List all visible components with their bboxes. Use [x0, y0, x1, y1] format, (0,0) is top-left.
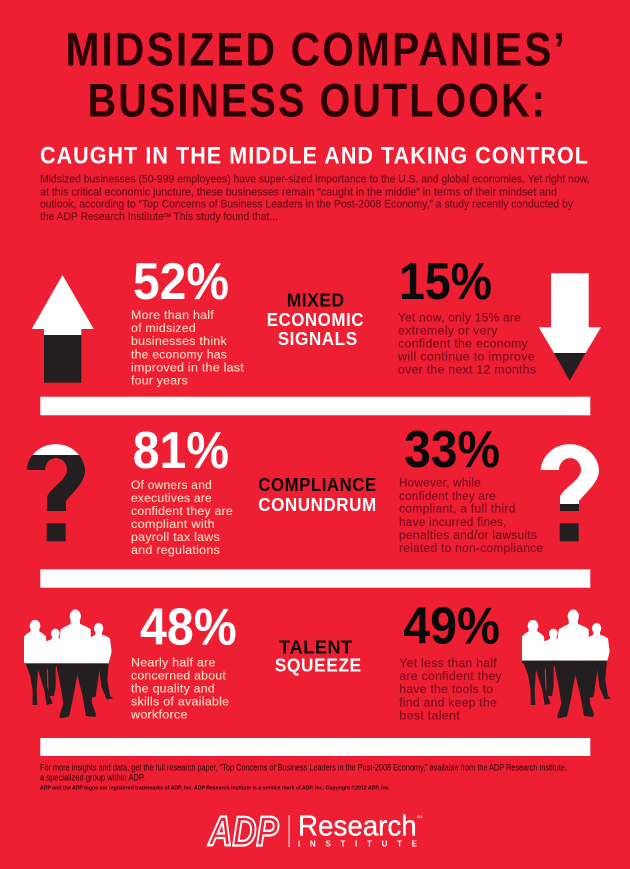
icon: people silhouette right — [522, 610, 611, 718]
stat: 15 percent — [397, 253, 536, 376]
text: 81 percent description — [131, 478, 233, 557]
text: 33 percent description — [399, 476, 543, 555]
text: 15 percent description: Yet now, only 15% are — [398, 311, 521, 325]
band 3 — [40, 738, 590, 756]
stat: 33 percent — [399, 421, 543, 555]
text: 33 percent description: However, while — [399, 476, 481, 490]
text: 52 percent description: four years — [131, 374, 188, 388]
text: 52 percent description — [131, 308, 244, 388]
text: 52 percent description: improved in the last — [131, 360, 244, 374]
heading: talent squeeze — [275, 636, 362, 676]
intro paragraph: This study found that... — [171, 211, 278, 223]
heading: mixed economic signals: MIXED — [287, 290, 345, 311]
icon: question mark right — [541, 444, 599, 541]
intro paragraph: Midsized businesses (50-999 employees) have super-sized importance to the U.S. and global economies. Yet right now, — [40, 174, 590, 186]
text: 49 percent description: have the tools to — [399, 682, 493, 696]
heading: compliance conundrum: COMPLIANCE — [258, 474, 377, 495]
text: 48 percent description: skills of available — [131, 695, 229, 709]
text: 15 percent description: confident the economy — [398, 337, 529, 351]
title: BUSINESS OUTLOOK: — [88, 74, 547, 127]
footer note — [40, 763, 567, 792]
text: 48 percent description: Nearly half are — [131, 656, 216, 670]
text: 15 percent description: will continue to improve — [397, 350, 535, 364]
text: 49 percent description: find and keep the — [399, 696, 497, 710]
stat: 52 percent: 52% — [133, 253, 229, 311]
heading: compliance conundrum: CONUNDRUM — [258, 494, 377, 515]
stat: 81 percent — [131, 422, 233, 557]
text: 33 percent description: penalties and/or lawsuits — [399, 528, 537, 542]
logo mark: ADP: ADP — [208, 808, 279, 854]
heading: compliance conundrum — [258, 474, 377, 515]
band 1 — [40, 397, 590, 415]
stat: 49 percent — [399, 597, 503, 722]
text: 49 percent description: best talent — [399, 708, 460, 722]
title — [66, 23, 567, 127]
text: 81 percent description: payroll tax laws — [131, 530, 220, 544]
intro paragraph: at this critical economic juncture, these businesses remain “caught in the middle” in terms of their mindset and — [40, 186, 557, 198]
icon: question mark left — [27, 444, 85, 541]
stat: 81 percent: 81% — [133, 422, 229, 480]
text: 49 percent description — [399, 656, 503, 722]
text: 48 percent description: the quality and — [131, 682, 215, 696]
intro paragraph — [40, 174, 590, 223]
logo: ADP Research Institute — [208, 808, 422, 854]
text: 52 percent description: the economy has — [131, 348, 227, 362]
heading: talent squeeze: SQUEEZE — [275, 655, 362, 676]
logo divider — [289, 815, 290, 847]
text: 52 percent description: businesses think — [131, 334, 228, 348]
text: 81 percent description: and regulations — [131, 543, 220, 557]
heading: mixed economic signals — [267, 290, 364, 349]
icon: people silhouette left — [24, 610, 113, 718]
band 2 — [40, 569, 590, 588]
text: 49 percent description: Yet less than half — [399, 656, 497, 670]
text: 33 percent description: compliant, a full third — [399, 502, 516, 516]
text: 81 percent description: compliant with — [131, 517, 215, 531]
text: 15 percent description: extremely or very — [398, 324, 498, 338]
footer note: a specialized group within ADP. — [40, 772, 145, 782]
icon: up arrow — [32, 275, 94, 383]
text: 33 percent description: have incurred fines, — [399, 515, 507, 529]
legal line: ADP and the ADP logos are registered trademarks of ADP, Inc. ADP Research Institute is a service mark of ADP, Inc. Copyright ©2012 ADP, Inc. — [40, 785, 390, 792]
intro paragraph: SM — [164, 213, 171, 219]
text: 15 percent description — [397, 311, 536, 376]
stat: 48 percent — [130, 598, 237, 722]
heading: mixed economic signals: ECONOMIC — [267, 309, 364, 330]
text: 81 percent description: Of owners and — [131, 478, 212, 492]
text: 48 percent description: concerned about — [131, 669, 226, 683]
heading: talent squeeze: TALENT — [279, 636, 353, 657]
text: 81 percent description: confident they are — [131, 504, 233, 518]
text: 48 percent description: workforce — [130, 708, 188, 722]
intro paragraph: outlook, according to “Top Concerns of Business Leaders in the Post-2008 Economy,” a study recently conducted by — [40, 199, 573, 211]
service mark: SM — [417, 815, 422, 819]
text: 48 percent description — [130, 656, 229, 722]
text: 52 percent description: of midsized — [131, 321, 196, 335]
text: 52 percent description: More than half — [131, 308, 214, 322]
stat: 52 percent — [131, 253, 244, 388]
text: 81 percent description: executives are — [131, 491, 212, 505]
icon: down arrow — [539, 273, 601, 381]
heading: mixed economic signals: SIGNALS — [278, 328, 358, 349]
stat: 49 percent: 49% — [403, 597, 500, 655]
logo subline: INSTITUTE — [298, 840, 418, 849]
text: 33 percent description: confident they are — [399, 489, 496, 503]
stat: 48 percent: 48% — [140, 598, 237, 656]
text: 49 percent description: are confident they — [399, 669, 503, 683]
stat: 15 percent: 15% — [399, 253, 492, 311]
text: 15 percent description: over the next 12 months — [398, 362, 536, 376]
intro paragraph: the ADP Research Institute — [40, 211, 172, 223]
title: MIDSIZED COMPANIES’ — [66, 23, 567, 76]
stat: 33 percent: 33% — [404, 421, 500, 479]
logo wordmark: Research — [298, 811, 417, 843]
text: 33 percent description: related to non-compliance — [399, 541, 543, 555]
